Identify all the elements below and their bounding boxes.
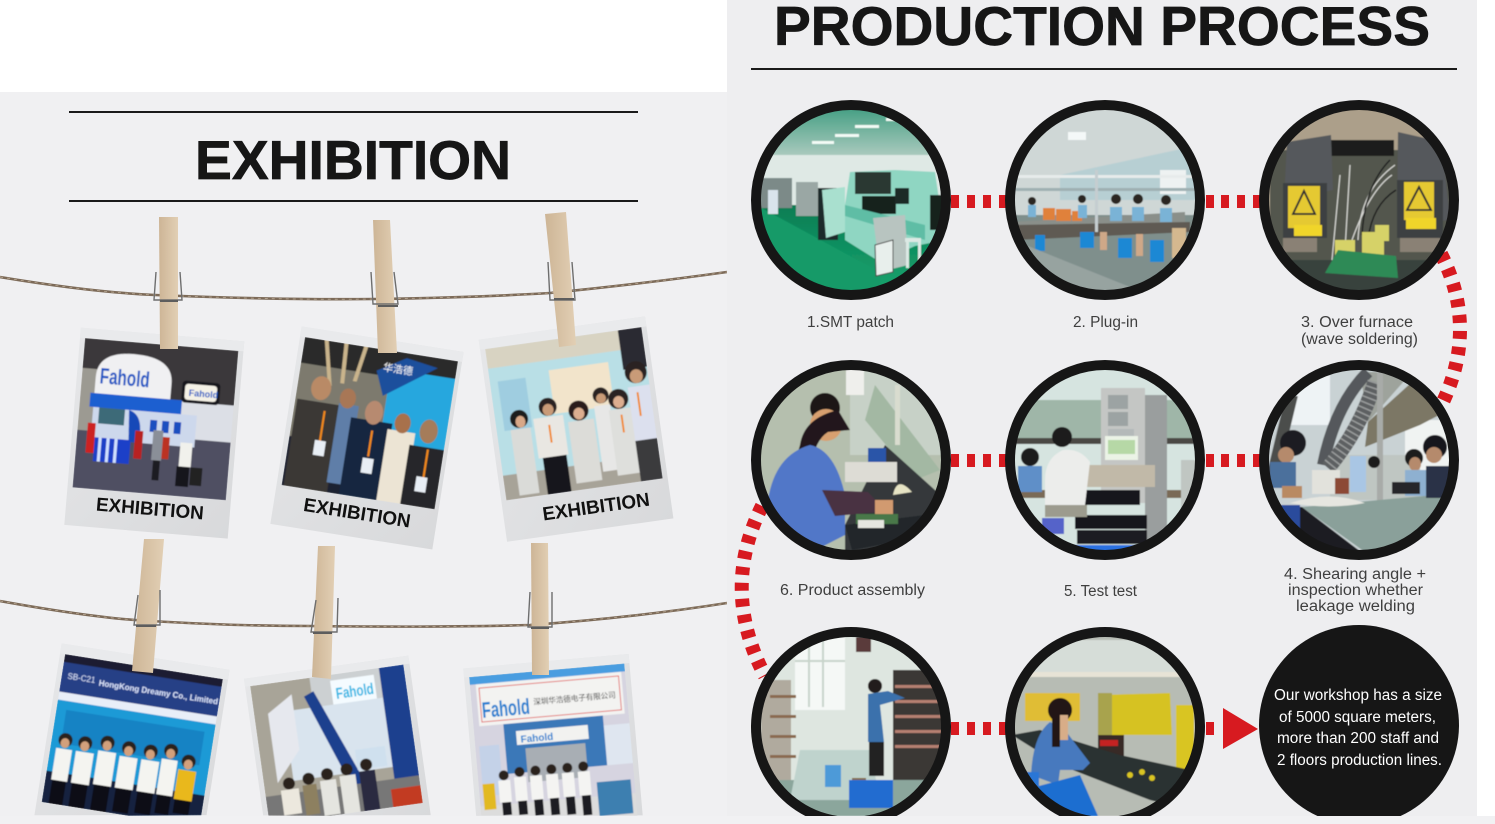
photo card 4: [34, 643, 230, 824]
caption: EXHIBITION: [95, 495, 205, 525]
summary circle: [1259, 625, 1459, 816]
label: step 3: (wave soldering): [1301, 331, 1418, 348]
bottom band: [0, 816, 1495, 824]
step 3 photo: wave soldering fixture: [1264, 105, 1454, 295]
dashed connectors: [951, 195, 1260, 735]
photo card 3: [479, 316, 673, 542]
arrow into summary circle: [1223, 708, 1258, 749]
photo card 2: [270, 326, 464, 550]
caption: EXHIBITION: [302, 495, 412, 533]
step 8 photo: final inspection: [1005, 627, 1205, 816]
photo: Fahold company fascia and staff: Fahold: [481, 694, 531, 723]
photo: four visitors at booth: 华浩德: [382, 361, 414, 378]
label: step 1: 1.SMT patch: [807, 314, 894, 331]
summary circle: Our workshop has a size: [1274, 687, 1442, 704]
label: step 6: 6. Product assembly: [780, 582, 925, 599]
photo: HongKong Dreamy booth team: [42, 654, 223, 824]
summary circle: of 5000 square meters,: [1279, 709, 1436, 726]
label: step 4: inspection whether: [1288, 582, 1423, 599]
summary circle: 2 floors production lines.: [1277, 752, 1442, 769]
step 6 photo: product assembly: [756, 365, 946, 555]
step 2 photo: plug-in line: [1010, 105, 1200, 295]
photo: team group at booth: [485, 327, 663, 501]
label: step 3: [1301, 314, 1418, 348]
photo card 1: [64, 328, 244, 539]
step 7 photo: aging racks: [751, 627, 951, 816]
clothespin 4: [132, 539, 164, 673]
clothespin 3: [545, 212, 576, 347]
photo: HongKong Dreamy booth team: HongKong Dreamy Co., Limited: [98, 679, 219, 706]
curved connector: step 6 to 7: [742, 506, 765, 676]
photo: HongKong Dreamy booth team: SB-C21: [67, 672, 96, 685]
clothespin 2: [371, 220, 398, 353]
photo: Fahold company fascia and staff: [469, 663, 638, 824]
photo: Fahold company fascia and staff: 深圳华浩德电子有限公司: [533, 689, 616, 706]
step 1 photo: SMT machine: [756, 105, 946, 295]
panel: production process: [727, 0, 1477, 816]
photo: blue exhibition stand: Fahold: [99, 363, 151, 393]
photo: blue exhibition stand: Fahold: [188, 388, 219, 400]
photo: Fahold booth entrance: Fahold: [335, 681, 375, 703]
clothespin 1: [154, 217, 182, 349]
label: step 4: 4. Shearing angle +: [1284, 566, 1426, 583]
photo: four visitors at booth: [282, 337, 458, 509]
rope: top row: [0, 272, 727, 299]
label: step 4: leakage welding: [1296, 598, 1415, 615]
curved connector: step 3 to 4: [1441, 254, 1460, 406]
panel: exhibition: [0, 92, 727, 824]
rope: bottom row: [0, 601, 727, 627]
photo: blue exhibition stand: [72, 338, 238, 500]
photo: Fahold booth entrance: [250, 664, 423, 824]
summary circle: more than 200 staff and: [1277, 730, 1439, 747]
photo: Fahold company fascia and staff: Fahold: [520, 732, 554, 746]
step 5 photo: test rack: [1010, 365, 1200, 555]
clothespin 5: [311, 546, 338, 679]
label: step 4: [1284, 566, 1426, 615]
photo card 6: [463, 654, 643, 824]
caption: EXHIBITION: [541, 490, 651, 525]
step 4 photo: shearing and inspection: [1264, 365, 1455, 555]
label: step 5: 5. Test test: [1064, 583, 1138, 600]
clothespin 6: [528, 543, 552, 675]
label: step 2: 2. Plug-in: [1073, 314, 1138, 331]
photo card 5: [244, 656, 431, 824]
exhibition heading: EXHIBITION: [195, 129, 511, 191]
label: step 3: 3. Over furnace: [1301, 314, 1413, 331]
